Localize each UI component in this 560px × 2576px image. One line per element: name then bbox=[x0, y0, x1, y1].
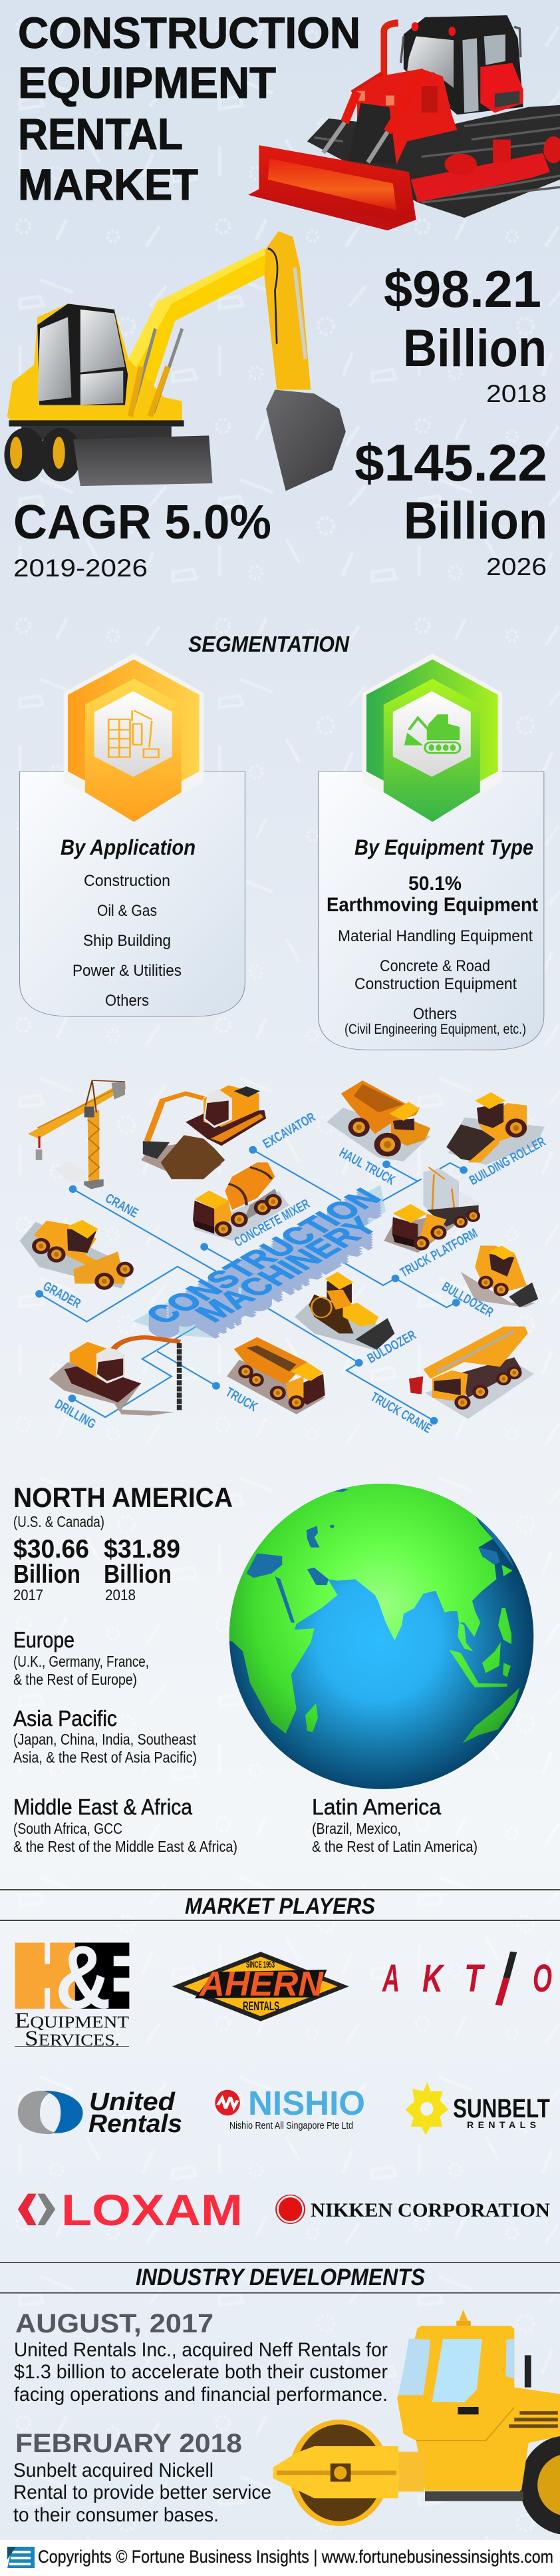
development: february 2018: FEBRUARY 2018 bbox=[15, 2429, 242, 2458]
labels: machine names: BULLDOZER bbox=[440, 1279, 496, 1321]
logo: nishio: NISHIO bbox=[248, 2084, 365, 2122]
heading: by equipment type: By Equipment Type bbox=[354, 835, 533, 859]
region: asia pacific: Asia Pacific bbox=[13, 1706, 117, 1731]
title: EQUIPMENT bbox=[18, 58, 276, 107]
stat: 2026: Billion bbox=[404, 491, 547, 550]
illustration: yellow excavator bbox=[4, 231, 346, 491]
development: august 2017: AUGUST, 2017 bbox=[15, 2309, 213, 2338]
stat: 2018: 2018 bbox=[486, 380, 547, 407]
region: latin america bbox=[312, 1795, 478, 1855]
market size stats bbox=[13, 260, 547, 582]
list: equipment types: Construction Equipment bbox=[354, 975, 517, 993]
card and badge bbox=[20, 654, 245, 1016]
list: equipment types: Material Handling Equipment bbox=[338, 927, 533, 945]
logo: H&E equipment services: EQUIPMENT bbox=[15, 2009, 129, 2033]
vehicle: dump truck bbox=[227, 1337, 325, 1414]
region: europe bbox=[13, 1627, 149, 1688]
stat: north america 2018: $31.89 bbox=[104, 1535, 180, 1564]
title bbox=[18, 8, 360, 209]
vehicle: grader bbox=[20, 1220, 134, 1290]
vehicle: concrete mixer bbox=[193, 1162, 289, 1241]
panel: by application bbox=[20, 654, 245, 1016]
stat: north america 2018: Billion bbox=[104, 1560, 172, 1589]
card and badge bbox=[318, 654, 544, 1050]
development: february 2018: to their consumer bases. bbox=[13, 2504, 219, 2526]
development: february 2018 bbox=[13, 2429, 271, 2526]
logo: ahern rentals: SINCE 1953 bbox=[246, 1959, 275, 1970]
list: applications: Others bbox=[105, 992, 149, 1010]
region: middle east and africa: Middle East & Africa bbox=[13, 1795, 193, 1819]
labels: machine names: TRUCK bbox=[223, 1385, 260, 1414]
stat: 2018 bbox=[384, 260, 547, 407]
central title: construction machinery: MACHINERY bbox=[187, 1212, 386, 1327]
logo: ahern rentals: RENTALS bbox=[243, 2000, 279, 2013]
stat: 2026: 2026 bbox=[486, 553, 547, 580]
logo: sunbelt rentals: RENTALS bbox=[467, 2119, 536, 2130]
highlight: earthmoving equipment bbox=[327, 873, 538, 916]
stat: 2018: $98.21 bbox=[384, 260, 541, 318]
illustration: red bulldozer bbox=[248, 15, 560, 230]
stat: north america 2017: $30.66 bbox=[13, 1535, 89, 1564]
highlight: earthmoving equipment: 50.1% bbox=[408, 873, 462, 895]
vehicle: tower crane bbox=[28, 1080, 126, 1189]
labels: machine names: TRUCK CRANE bbox=[368, 1390, 434, 1436]
labels: machine names: BULDOZER bbox=[365, 1328, 419, 1367]
connector lines bbox=[35, 1146, 468, 1424]
labels: machine names: GRADER bbox=[41, 1279, 83, 1311]
list: applications: Power & Utilities bbox=[72, 962, 182, 980]
illustration: road roller bbox=[273, 2310, 560, 2535]
stat: CAGR: CAGR 5.0% bbox=[13, 496, 271, 549]
list: equipment types bbox=[338, 927, 533, 1037]
footer bbox=[0, 2540, 560, 2576]
logo: aktio: T bbox=[464, 1957, 486, 2000]
diagram: construction machinery bbox=[20, 1080, 548, 1436]
stat: north america 2018 bbox=[104, 1535, 180, 1604]
region: middle east and africa: & the Rest of the Middle East & Africa) bbox=[13, 1838, 237, 1855]
list: equipment types: Others bbox=[413, 1005, 457, 1023]
region: north america: (U.S. & Canada) bbox=[13, 1513, 104, 1530]
region: latin america: Latin America bbox=[312, 1795, 442, 1819]
heading: market players: MARKET PLAYERS bbox=[185, 1894, 375, 1919]
list: applications bbox=[72, 872, 182, 1010]
logo: loxam: LOXAM bbox=[61, 2185, 243, 2235]
region: latin america: & the Rest of Latin America) bbox=[312, 1838, 478, 1855]
development: february 2018: Rental to provide better service bbox=[13, 2481, 271, 2503]
stat: 2026: $145.22 bbox=[354, 433, 547, 492]
central title: construction machinery: CONSTRUCTION bbox=[138, 1183, 390, 1329]
title: CONSTRUCTION bbox=[18, 8, 360, 57]
labels: machine names: HAUL TRUCK bbox=[337, 1146, 398, 1188]
heading: industry developments: INDUSTRY DEVELOPMENTS bbox=[136, 2264, 425, 2290]
logo: H&E equipment services: SERVICES. bbox=[25, 2027, 120, 2051]
heading: segmentation: SEGMENTATION bbox=[188, 632, 350, 656]
stat: north america 2017: 2017 bbox=[13, 1586, 43, 1604]
logo: united rentals: Rentals bbox=[88, 2110, 182, 2138]
logo: ahern rentals: AHERN bbox=[198, 1965, 324, 2004]
vehicle: excavator bbox=[141, 1085, 266, 1179]
labels: machine names: CONCRETE MIXER bbox=[232, 1196, 313, 1250]
stat: 2026 bbox=[354, 433, 547, 580]
logo: sunbelt rentals bbox=[405, 2082, 550, 2135]
logo: ahern rentals bbox=[172, 1952, 349, 2022]
heading: by application: By Application bbox=[61, 835, 196, 859]
vehicle: skid loader bbox=[461, 1245, 538, 1307]
logo: aktio: A bbox=[382, 1957, 400, 2000]
labels: machine names: CRANE bbox=[102, 1191, 140, 1221]
list: applications: Oil & Gas bbox=[97, 902, 157, 920]
title: RENTAL bbox=[18, 109, 183, 158]
labels: machine names: DRILLING bbox=[52, 1397, 98, 1432]
development: february 2018: Sunbelt acquired Nickell bbox=[13, 2460, 213, 2481]
vehicle: truck crane bbox=[409, 1327, 534, 1419]
logo: nishio: Nishio Rent All Singapore Pte Ltd bbox=[229, 2120, 353, 2131]
logo: nikken corporation: NIKKEN CORPORATION bbox=[311, 2199, 550, 2221]
region: asia pacific bbox=[13, 1706, 197, 1766]
region: north america: NORTH AMERICA bbox=[13, 1482, 233, 1513]
seas bbox=[247, 1488, 514, 1623]
region: asia pacific: (Japan, China, India, Southeast bbox=[13, 1731, 197, 1748]
vehicle: haul truck bbox=[327, 1080, 430, 1162]
central title shadow bbox=[133, 1185, 386, 1338]
vehicle: truck platform bbox=[384, 1168, 480, 1253]
list: applications: Ship Building bbox=[83, 932, 171, 950]
stat: CAGR bbox=[13, 496, 271, 582]
stat: north america 2017 bbox=[13, 1535, 89, 1604]
region: asia pacific: Asia, & the Rest of Asia Pacific) bbox=[13, 1749, 197, 1766]
labels: machine names bbox=[41, 1110, 548, 1436]
logo: aktio bbox=[382, 1952, 552, 2006]
panel: by equipment type bbox=[318, 654, 544, 1050]
development: august 2017: $1.3 billion to accelerate both their customer bbox=[14, 2361, 388, 2383]
development: august 2017: United Rentals Inc., acquired Neff Rentals for bbox=[14, 2339, 388, 2361]
region: latin america: (Brazil, Mexico, bbox=[312, 1820, 401, 1837]
logo: H&E equipment services bbox=[15, 1927, 129, 2051]
labels: machine names: EXCAVATOR bbox=[261, 1110, 319, 1152]
icon: fortune business insights logo bbox=[7, 2547, 35, 2568]
logo: united rentals bbox=[18, 2088, 182, 2138]
region: europe: & the Rest of Europe) bbox=[13, 1671, 137, 1688]
logo: nishio bbox=[215, 2084, 365, 2131]
labels: machine names: TRUCK PLATFORM bbox=[398, 1226, 480, 1281]
globe bbox=[214, 1466, 533, 1789]
region: north america bbox=[13, 1482, 233, 1604]
vehicle: drilling rig bbox=[49, 1337, 180, 1416]
logo: nikken corporation bbox=[276, 2195, 550, 2223]
logo: H&E equipment services: & bbox=[55, 1927, 111, 2028]
land: eurasia and africa bbox=[229, 1484, 520, 1743]
region: europe: (U.K., Germany, France, bbox=[13, 1653, 149, 1670]
development: august 2017: facing operations and financial performance. bbox=[14, 2384, 388, 2406]
list: equipment types: (Civil Engineering Equipment, etc.) bbox=[345, 1022, 526, 1037]
title: MARKET bbox=[18, 160, 198, 209]
region: middle east and africa bbox=[13, 1795, 237, 1855]
list: applications: Construction bbox=[84, 872, 170, 890]
vehicle: building roller bbox=[446, 1092, 545, 1165]
stat: 2018: Billion bbox=[403, 318, 547, 377]
stat: north america 2017: Billion bbox=[13, 1560, 80, 1589]
logo: united rentals: United bbox=[89, 2088, 176, 2116]
highlight: earthmoving equipment: Earthmoving Equipment bbox=[327, 894, 538, 916]
region: europe: Europe bbox=[13, 1627, 74, 1652]
region: middle east and africa: (South Africa, GCC bbox=[13, 1820, 122, 1837]
stat: CAGR: 2019-2026 bbox=[13, 554, 148, 582]
development: august 2017 bbox=[14, 2309, 388, 2406]
vehicle: tractor bulldozer bbox=[295, 1272, 394, 1350]
list: equipment types: Concrete & Road bbox=[380, 957, 490, 975]
logo: aktio: K bbox=[422, 1957, 445, 2000]
stat: north america 2018: 2018 bbox=[105, 1586, 136, 1604]
